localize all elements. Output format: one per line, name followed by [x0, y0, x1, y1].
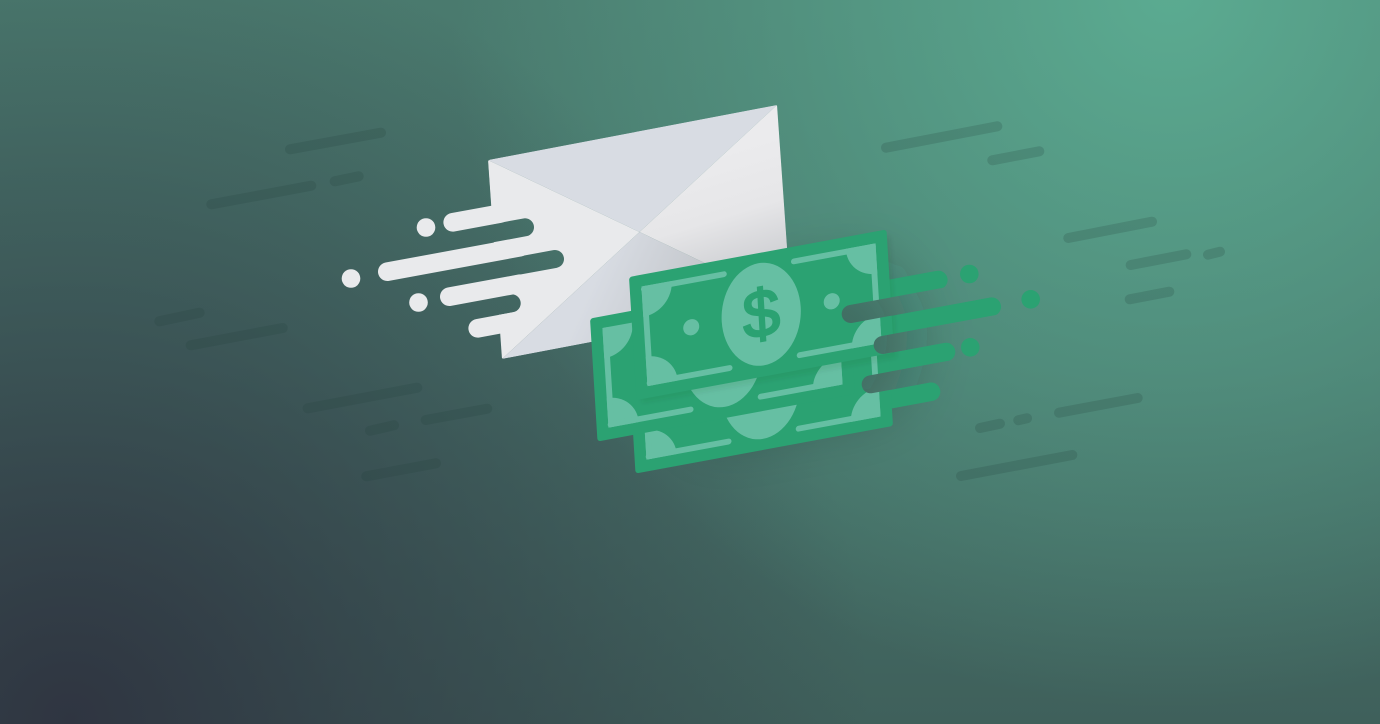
- bill small dots: [683, 292, 840, 337]
- bill: back: [633, 356, 893, 473]
- bill frame bars: [644, 247, 879, 383]
- money speed streaks: [865, 280, 992, 404]
- envelope speed dots: [342, 218, 435, 312]
- bill oval with dollar sign: $: [741, 274, 782, 355]
- illustration: envelope and money in flight: [285, 105, 1225, 481]
- bill frame corners: [641, 243, 882, 386]
- icon: money stack: [590, 229, 992, 474]
- envelope speed streaks: [387, 214, 530, 328]
- soft shadow under money: [680, 260, 915, 440]
- bill oval with dollar sign: [722, 262, 801, 366]
- money speed dots: [960, 265, 1040, 357]
- bill: front: [629, 229, 894, 400]
- background speed dashes: [159, 126, 1220, 476]
- bill: middle: [590, 311, 843, 441]
- front bill shadow: [688, 240, 892, 393]
- icon: envelope: [342, 105, 791, 359]
